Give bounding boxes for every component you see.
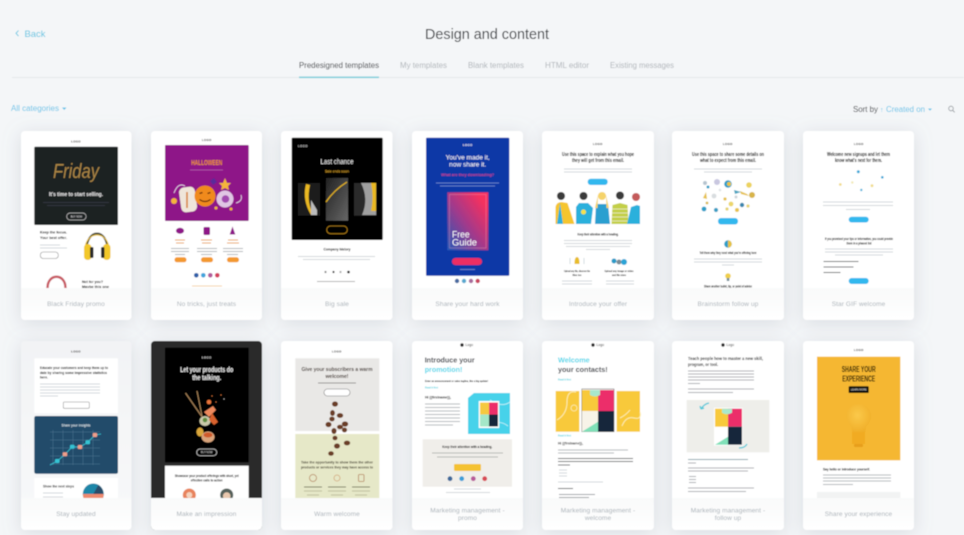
caption: welcome: [584, 515, 611, 522]
offerings panel: Showcase your product offerings with short, yet: [175, 474, 239, 478]
card: Star GIF welcome: LOGO: [854, 142, 864, 146]
feature: lightbulb: [704, 273, 752, 288]
intro text: Say hello or introduce yourself.: [823, 466, 870, 472]
card: Star GIF welcome: [803, 131, 914, 320]
caption strip: [151, 288, 262, 320]
image: tablet artwork: [687, 400, 769, 452]
next offer: Maybe this one: [82, 285, 109, 289]
card: Stay updated: LOGO: [71, 350, 81, 354]
next offer: [48, 277, 109, 289]
headline: promotion!: [425, 365, 462, 374]
card: No tricks, just treats: LOGO: [202, 138, 212, 142]
card: Marketing management - follow up: [672, 341, 784, 530]
stars: [839, 170, 884, 191]
intro panel: here.: [40, 376, 48, 380]
category filter: All categories: [11, 104, 59, 113]
caption: Make an impression: [177, 511, 237, 518]
caption: Stay updated: [56, 511, 96, 518]
heading: Use this space to explain what you hope: [562, 152, 634, 158]
hero: free guide: Free: [452, 230, 470, 240]
headline: [558, 356, 608, 382]
two features: Upload any file, discover the: [564, 269, 590, 273]
logo: Logo: [466, 343, 473, 347]
hero: free guide: Guide: [452, 237, 477, 247]
hero: sushi: LOGO: [202, 356, 212, 360]
two features: files too: [572, 273, 582, 277]
caption strip: [412, 288, 523, 320]
caption: promo: [458, 515, 477, 522]
tabs: My templates: [400, 61, 447, 70]
welcome copy: [823, 202, 893, 222]
caption: Brainstorm follow up: [698, 301, 759, 308]
two features: Upload any image or video: [604, 269, 634, 273]
company history: [298, 248, 375, 282]
offerings panel: effective calls to action: [191, 478, 223, 482]
sort control: Created on: [886, 105, 925, 114]
caption: follow up: [715, 515, 742, 522]
hero: sushi: Let your products do: [180, 367, 233, 374]
hero: free guide: [426, 138, 509, 276]
card: Make an impression: [151, 341, 262, 530]
chart panel: [34, 416, 118, 474]
heading: [692, 152, 764, 172]
lower panel: Take the opportunity to show them the other: [301, 460, 373, 464]
chart panel: Share your insights: [62, 424, 91, 428]
card: Black Friday promo: [21, 131, 132, 320]
caption strip: [21, 498, 132, 530]
top panel: [295, 358, 379, 431]
caption: No tricks, just treats: [177, 301, 237, 308]
headline: Welcome: [558, 356, 590, 364]
hero: free guide: What are they downloading?: [441, 173, 495, 177]
offer text: Keep the focus.: [40, 230, 67, 234]
images: three panels: [556, 389, 640, 432]
panel: beige promotion: [423, 439, 512, 487]
caption: Marketing management -: [430, 508, 505, 514]
lower panel: products or services they may have access to: [301, 466, 374, 470]
card: Brainstorm follow up: LOGO: [723, 142, 733, 146]
lower panel: [295, 434, 379, 500]
caption strip: [542, 288, 654, 320]
caption: Introduce your offer: [569, 301, 628, 308]
icon: search: [949, 106, 955, 112]
caption: Warm welcome: [314, 511, 360, 518]
icon: headphones: [84, 234, 110, 260]
headline: Teach people how to master a new skill,: [688, 356, 763, 361]
caption: Share your experience: [825, 511, 893, 518]
social icons: [194, 273, 220, 278]
tabs: Predesigned templates: [299, 61, 379, 70]
card: Share your experience: LOGO: [854, 348, 864, 352]
card: Introduce your offer: LOGO: [593, 142, 603, 146]
body text: Read it first: [558, 434, 571, 438]
headline: Read it first: [558, 378, 571, 382]
caption strip: [281, 498, 392, 530]
hero: Last chance: Sale ends soon: [325, 169, 349, 173]
headline: [425, 356, 488, 425]
heading: [827, 152, 890, 164]
intro text: [823, 466, 891, 484]
caption: [561, 508, 635, 522]
intro panel: Educate your customers and keep them up to: [40, 366, 109, 370]
details: If you promised your tips or information, you could provide: [825, 237, 893, 241]
next steps panel: Show the next steps: [43, 484, 74, 488]
hero: free guide: LOGO: [463, 143, 473, 147]
sort control: Sort by: [853, 105, 878, 114]
heading: know what's next for them.: [835, 158, 882, 164]
card: Black Friday promo: LOGO: [71, 139, 81, 143]
image: promotional artwork: [468, 393, 510, 434]
body text: [564, 232, 632, 250]
feature: brain: Tell them why they need what you're offering here: [700, 251, 757, 255]
logo: [591, 343, 604, 347]
card: Introduce your offer: [542, 131, 654, 320]
caption: Marketing management -: [561, 508, 635, 514]
heading: they will get from this email.: [572, 158, 624, 164]
two features: and file sizes: [612, 273, 626, 277]
social icons: [455, 279, 480, 283]
logo: Logo: [596, 343, 604, 347]
hero: Friday: BUY NOW: [71, 215, 83, 218]
company history: Company history: [324, 248, 351, 252]
hero: lightbulb: SHARE YOUR: [842, 365, 876, 374]
tabs: Blank templates: [468, 61, 524, 70]
card: Share your hard work: [412, 131, 523, 320]
hero: lightbulb: LEARN MORE: [851, 388, 867, 392]
caption strip: [151, 498, 262, 530]
body text: [558, 434, 633, 498]
caption strip: [672, 288, 784, 320]
caption strip: [21, 288, 132, 320]
hero: Last chance: [292, 138, 383, 240]
heading: Welcome new signups and let them: [827, 152, 890, 158]
feature: lightbulb: Share another bullet, tip, or point of advice: [704, 284, 752, 288]
heading: [562, 152, 634, 185]
hero: lightbulb: EXPERIENCE: [842, 374, 876, 383]
headline: Introduce your: [425, 356, 475, 364]
hero: Last chance: Last chance: [320, 159, 354, 166]
illustration: five people: [556, 192, 640, 224]
hero: sushi: BUY NOW: [201, 451, 213, 454]
hero: Halloween: HALLOWEEN: [191, 160, 222, 167]
top panel: Give your subscribers a warm: [302, 367, 373, 373]
hero: sushi: [165, 348, 249, 462]
title: Design and content: [425, 26, 550, 43]
intro panel: [34, 358, 118, 413]
offerings panel: [165, 466, 249, 502]
logo: Logo: [726, 343, 734, 347]
intro panel: date by sharing some impressive statistics: [40, 371, 107, 375]
offer text: [40, 230, 67, 258]
logo: [721, 343, 734, 347]
headline: your contacts!: [558, 365, 608, 374]
headline: Hi {{firstname}},: [425, 394, 451, 400]
hero: Friday: Friday: [53, 161, 100, 183]
next offer: Not for you?: [82, 280, 104, 284]
card: Warm welcome: [281, 341, 392, 530]
offer text: Your best offer.: [40, 235, 67, 240]
caption strip: [672, 498, 784, 530]
card: Warm welcome: LOGO: [332, 350, 342, 354]
next steps panel: [34, 478, 118, 504]
logo: [460, 343, 473, 347]
caption strip: [803, 288, 914, 320]
caption: Black Friday promo: [47, 301, 105, 308]
hero: Halloween: [165, 145, 249, 221]
header: back link: Back: [24, 29, 46, 40]
three offers: [171, 226, 243, 262]
caption: [691, 508, 765, 522]
hero: Friday: [34, 147, 118, 225]
details: [824, 237, 893, 284]
top panel: welcome!: [324, 374, 349, 380]
caption: Marketing management -: [691, 508, 765, 514]
body text: Keep their attention with a heading.: [578, 232, 619, 236]
feature: brain: [694, 240, 762, 265]
card: No tricks, just treats: [151, 131, 262, 320]
illustration: brainstorm doodles: [702, 179, 755, 224]
heading: Use this space to share some details on: [692, 152, 764, 158]
caption: [430, 508, 505, 522]
tabs: [12, 61, 964, 78]
caption: Big sale: [325, 301, 349, 308]
caption strip: [542, 498, 654, 530]
heading: what to expect from this email.: [699, 158, 756, 164]
panel: beige promotion: Keep their attention with a heading.: [442, 445, 492, 449]
card: Marketing management - welcome: [542, 341, 654, 530]
headline: program, or tool.: [688, 362, 718, 367]
caption strip: [281, 288, 392, 320]
caption strip: [412, 498, 523, 530]
hero: Friday: It's time to start selling.: [49, 192, 104, 198]
sort control: ↑: [880, 107, 884, 114]
hero: Last chance: LOGO: [298, 144, 308, 148]
caption strip: [803, 498, 914, 530]
body text: [688, 460, 754, 492]
two features: [562, 257, 634, 284]
sort control: [853, 105, 932, 114]
tabs: Existing messages: [610, 61, 674, 70]
card: Big sale: [281, 131, 392, 320]
card: Brainstorm follow up: [672, 131, 784, 320]
card: Marketing management - promo: [412, 341, 523, 530]
body text: Hi {{firstname}},: [558, 440, 583, 446]
headline: [688, 356, 763, 392]
card: Stay updated: [21, 341, 132, 530]
coffee beans: [326, 401, 350, 456]
details: them in a phased list: [846, 242, 872, 246]
hero: lightbulb: [817, 357, 900, 460]
caption: Star GIF welcome: [832, 301, 886, 308]
card: Share your experience: [803, 341, 914, 530]
tabs: HTML editor: [545, 61, 589, 70]
headline: Enter an announcement or sales tagline, like a big update!: [425, 379, 488, 383]
headline: Read it first: [425, 386, 438, 390]
hero: free guide: now share it.: [449, 162, 487, 168]
hero: sushi: the talking.: [192, 375, 221, 382]
caption: Share your hard work: [435, 301, 500, 308]
hero: free guide: You've made it,: [446, 156, 490, 162]
